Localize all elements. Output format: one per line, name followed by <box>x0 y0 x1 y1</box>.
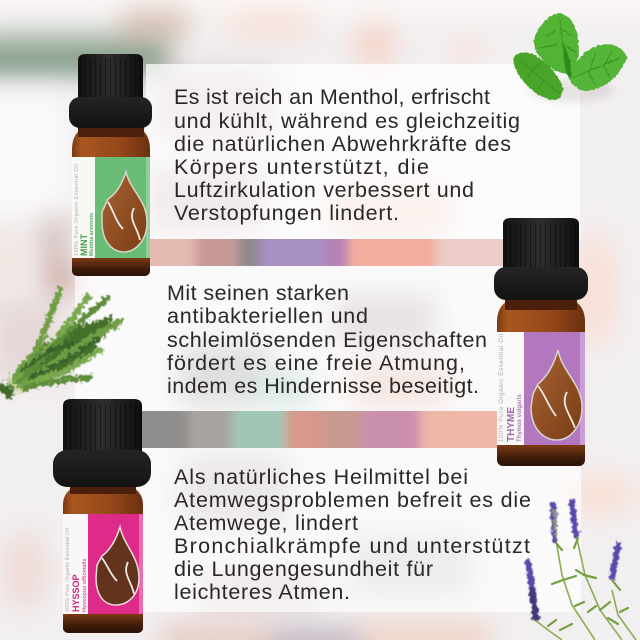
text block: mint description: Es ist reich an Menthol, erfrischt <box>174 85 490 109</box>
bottle: hyssop <box>53 399 151 633</box>
bottle: hyssop: HYSSOP <box>71 574 81 612</box>
text block: hyssop description: Bronchialkrämpfe und unterstützt <box>174 534 530 558</box>
text block: mint description: und kühlt, während es gleichzeitig <box>174 109 520 133</box>
icon: thyme sprig <box>0 290 119 397</box>
text block: mint description: Verstopfungen lindert. <box>174 201 399 225</box>
bottle: thyme: THYME <box>506 407 517 442</box>
panel: top text panel <box>146 64 580 239</box>
band under top panel <box>150 239 503 266</box>
icon: hyssop flowers <box>528 502 636 640</box>
text block: thyme description: schleimlösenden Eigenschaften <box>167 328 487 352</box>
bottle: mint: Mentha arvensis <box>89 213 95 256</box>
text block: mint description: die natürlichen Abwehrkräfte des <box>174 132 511 156</box>
band under middle panel <box>142 411 497 448</box>
panel: middle text panel <box>75 266 502 411</box>
panel: bottom text panel <box>100 448 581 612</box>
text block: hyssop description: die Lungengesundheit für <box>174 557 433 581</box>
text block: mint description: Körpers unterstützt, die <box>174 155 429 179</box>
text block: thyme description: antibakteriellen und <box>167 304 368 328</box>
text block: hyssop description: leichteres Atmen. <box>174 580 350 604</box>
text block: thyme description: fördert es eine freie Atmung, <box>167 351 465 375</box>
text block: mint description: Luftzirkulation verbessert und <box>174 178 474 202</box>
icon: mint leaves <box>513 13 627 102</box>
bottle: hyssop: Hyssopus officinalis <box>82 558 88 612</box>
text block: hyssop description: Atemwegsproblemen befreit es die <box>174 488 531 512</box>
text block: hyssop description: Als natürliches Heilmittel bei <box>174 465 468 489</box>
bottle: thyme <box>494 218 588 466</box>
bottle: thyme: 100% Pure Organic Essential Oil <box>499 334 505 442</box>
text block: thyme description: indem es Hindernisse beseitigt. <box>167 374 479 398</box>
bottle: mint <box>69 54 152 276</box>
bottle: mint: 100% Pure Organic Essential Oil <box>74 164 80 256</box>
text block: hyssop description: Atemwege, lindert <box>174 511 358 535</box>
text block: thyme description: Mit seinen starken <box>167 281 349 305</box>
bottle: hyssop: 100% Pure Organic Essential Oil <box>65 528 71 612</box>
bottle: thyme: Thymus vulgaris <box>517 394 523 442</box>
under-panel tints <box>150 170 260 230</box>
bottle: mint: MINT <box>79 234 89 256</box>
